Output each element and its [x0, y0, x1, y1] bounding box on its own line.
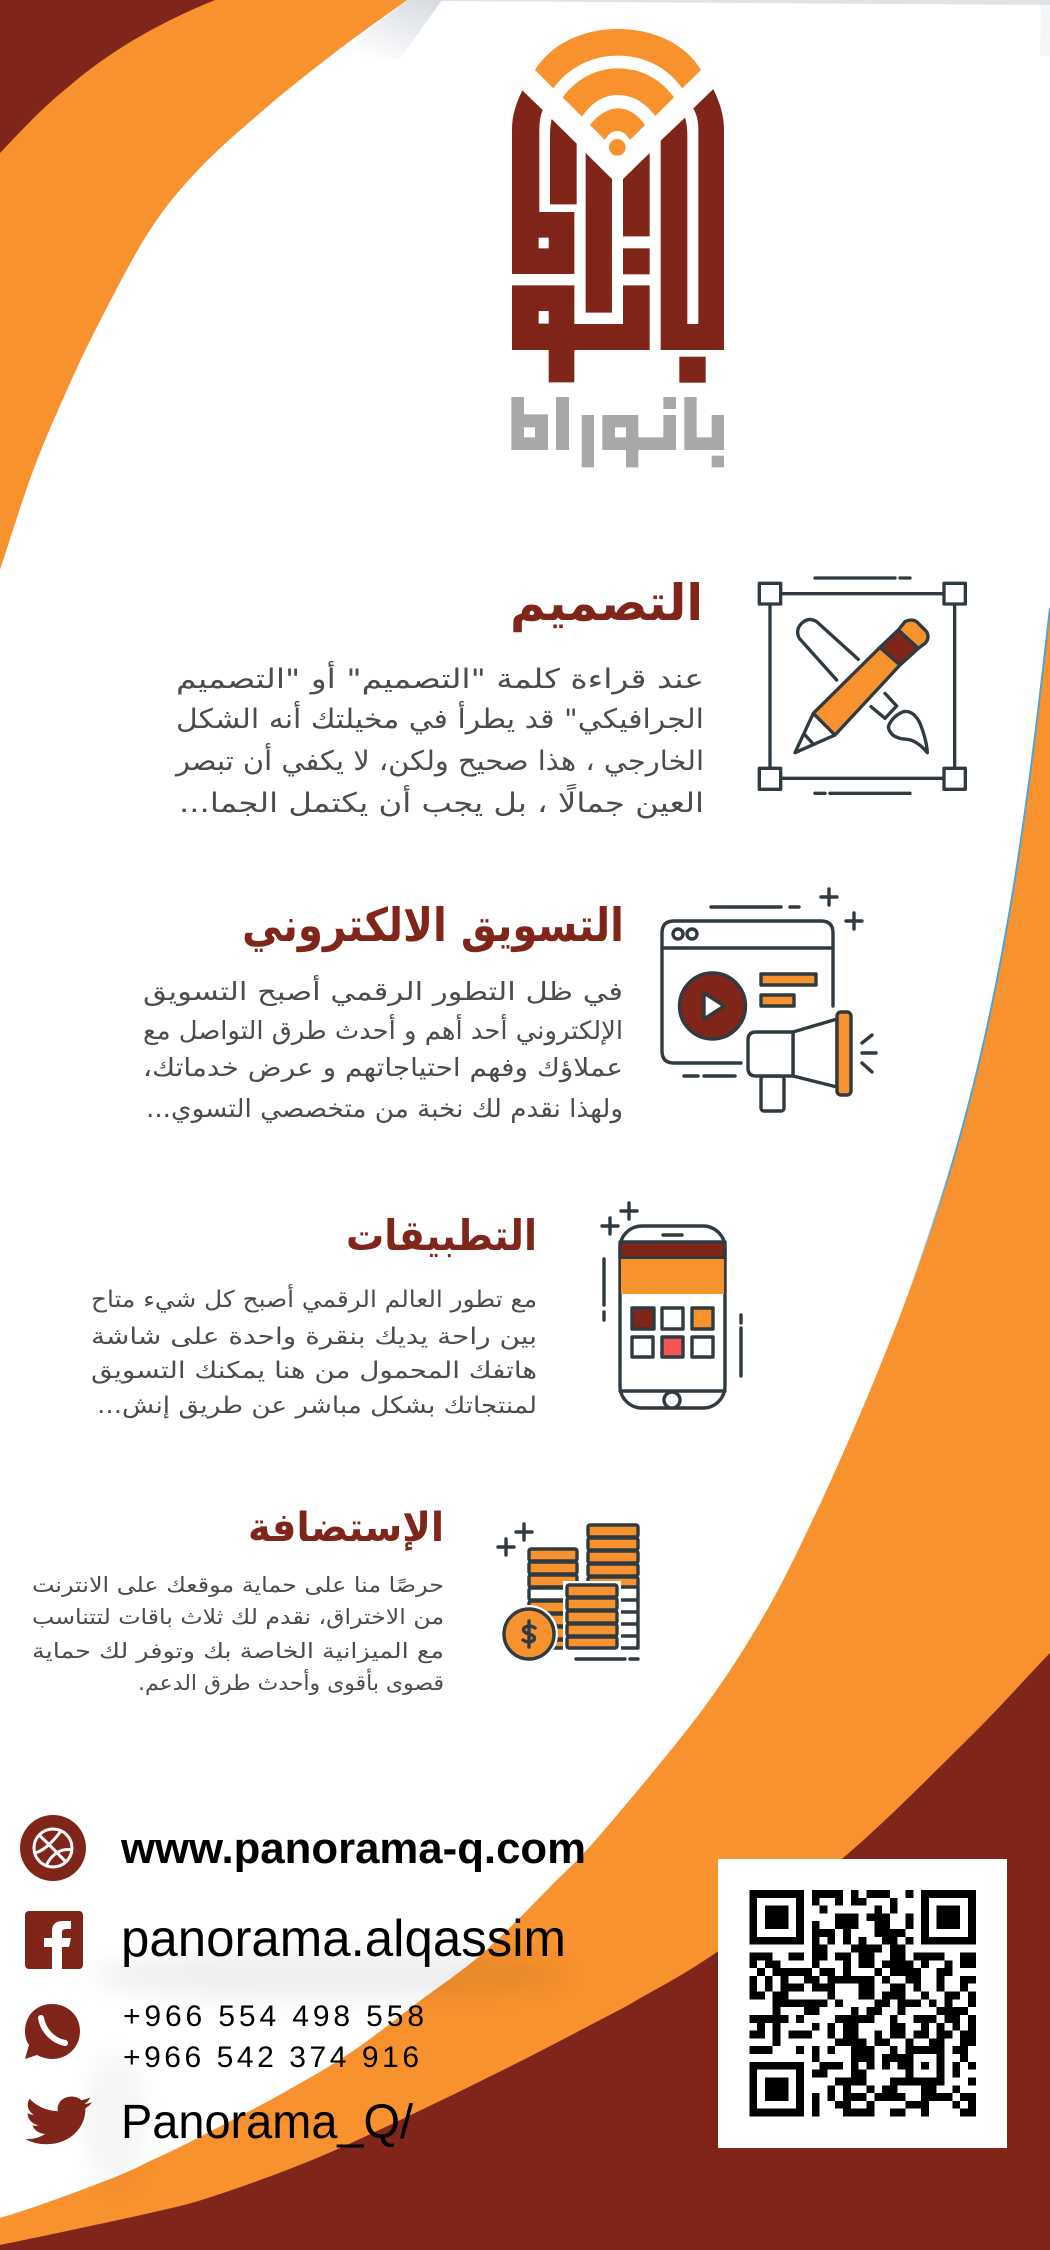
text block: hosting	[32, 1573, 444, 1696]
icon: facebook	[25, 1911, 83, 1969]
contact: phone numbers	[25, 2000, 424, 2074]
heading: design: التصميم	[510, 574, 703, 632]
phone number 2: +966 542 374 916	[123, 2041, 419, 2074]
section: design	[174, 574, 704, 819]
text block: design	[174, 660, 704, 819]
website url: www.panorama-q.com	[120, 1824, 586, 1873]
facebook handle: panorama.alqassim	[121, 1910, 566, 1968]
logo	[511, 29, 724, 467]
text block: apps: بين راحة يديك بنقرة واحدة على شاشة	[91, 1324, 537, 1350]
text block: hosting: قصوى بأقوى وأحدث طرق الدعم.	[138, 1668, 444, 1696]
heading: e-marketing: التسويق الالكتروني	[242, 898, 624, 952]
QR code card	[718, 1859, 1007, 2148]
section: apps	[91, 1211, 537, 1419]
text block: e-marketing: عملاؤك وفهم احتياجاتهم و عرض خدماتك،	[143, 1053, 623, 1083]
text block: e-marketing: ولهذا نقدم لك نخبة من متخصصي التسوي...	[146, 1094, 623, 1124]
logo: maroon kufic lettering	[512, 89, 724, 383]
text block: apps: هاتفك المحمول من هنا يمكنك التسويق	[91, 1358, 537, 1384]
icon: coin stacks	[498, 1524, 638, 1663]
contact: twitter	[25, 2096, 414, 2149]
contact: facebook	[25, 1910, 566, 1969]
soft shadow behind contact block	[83, 1949, 570, 2190]
icon: smartphone with apps	[602, 1203, 741, 1408]
text block: apps: لمنتجاتك بشكل مباشر عن طريق إنش...	[97, 1393, 537, 1419]
text block: design: عند قراءة كلمة "التصميم" أو "التصميم	[176, 660, 704, 695]
background: top-left orange swoosh	[0, 0, 407, 570]
text block: e-marketing	[143, 974, 623, 1124]
section: e-marketing	[143, 898, 624, 1124]
text block: design: الجرافيكي" قد يطرأ في مخيلتك أنه الشكل	[176, 700, 704, 735]
icon: dribbble globe	[20, 1815, 86, 1881]
heading: apps: التطبيقات	[346, 1211, 537, 1260]
background: right and bottom orange band	[0, 608, 1050, 2250]
section: hosting	[32, 1505, 444, 1696]
text block: apps: مع تطور العالم الرقمي أصبح كل شيء متاح	[91, 1284, 537, 1313]
phone number 1: +966 554 498 558	[123, 2000, 424, 2033]
text block: hosting: حرصًا منا على حماية موقعك على الانترنت	[32, 1573, 444, 1597]
logo: wifi arcs	[535, 29, 701, 156]
icon: whatsapp	[25, 2004, 80, 2059]
text block: e-marketing: الإلكتروني أحد أهم و أحدث طرق التواصل مع	[143, 1013, 623, 1046]
icon: browser video and megaphone	[662, 889, 876, 1111]
text block: hosting: من الاختراق، نقدم لك ثلاث باقات لتتناسب	[32, 1605, 444, 1629]
text block: design: العين جمالًا ، بل يجب أن يكتمل الجما...	[179, 783, 704, 819]
text block: e-marketing: في ظل التطور الرقمي أصبح التسويق	[143, 974, 623, 1007]
background: top edge shadow	[333, 0, 1050, 59]
background: bottom maroon wave	[0, 1653, 1050, 2250]
background: top-left maroon swoosh	[0, 0, 215, 153]
contact: website	[20, 1815, 586, 1881]
twitter handle: Panorama_Q/	[121, 2096, 414, 2149]
icon: twitter	[25, 2097, 92, 2144]
icon: pencil and brush in frame	[759, 578, 965, 793]
logo: gray wordmark	[511, 397, 724, 467]
background: blue edge line	[905, 608, 1050, 1300]
text block: apps	[91, 1284, 537, 1419]
QR code	[749, 1890, 976, 2116]
heading: hosting: الإستضافة	[248, 1505, 444, 1551]
text block: hosting: مع الميزانية الخاصة بك وتوفر لك حماية	[32, 1639, 444, 1663]
text block: design: الخارجي ، هذا صحيح ولكن، لا يكفي أن تبصر	[174, 742, 704, 777]
